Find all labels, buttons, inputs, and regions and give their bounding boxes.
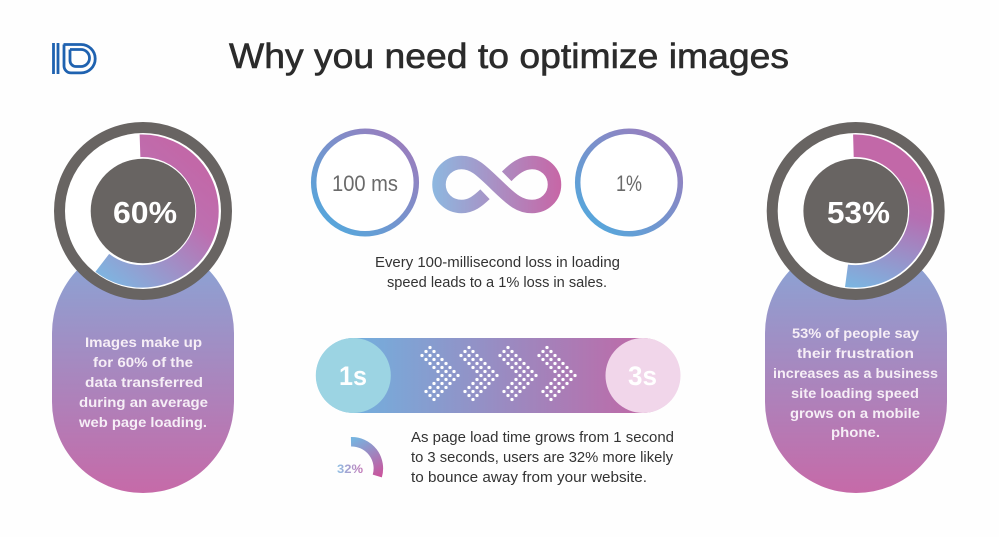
chart: 32% arc: 32% [337, 462, 363, 476]
chart: 32% arc [337, 442, 378, 476]
donut: 53% [772, 128, 939, 294]
arrows: dotted chevrons [422, 348, 575, 404]
text: left pill: during an average [79, 394, 208, 410]
circle: 100 ms [314, 131, 416, 234]
donut: 60% [60, 128, 226, 294]
text: left pill: data transferred [85, 374, 203, 390]
text: left pill: web page loading. [78, 414, 207, 430]
text: left pill [78, 334, 208, 430]
pill: left [52, 242, 234, 493]
text: sales loss: speed leads to a 1% loss in sales. [387, 275, 607, 291]
progress bar: 1s to 3s [316, 338, 680, 413]
text: right pill: site loading speed [791, 385, 919, 401]
icon: infinity [439, 162, 554, 206]
text: right pill: 53% of people say [792, 325, 919, 341]
text: sales loss: Every 100-millisecond loss in loading [375, 255, 620, 271]
donut: 53%: 53% [827, 195, 890, 230]
circle: 100 ms: 100 ms [332, 171, 398, 196]
text: right pill: increases as a business [773, 365, 938, 381]
badge: 1s: 1s [339, 361, 367, 391]
text: right pill: phone. [831, 424, 880, 440]
panel: 60% statistic [52, 128, 234, 493]
text: bounce rate: to bounce away from your website. [411, 470, 647, 486]
text: right pill: their frustration [797, 345, 914, 361]
badge: 3s: 3s [628, 361, 657, 391]
badge: 1s [316, 338, 391, 413]
circle: 1% [578, 131, 680, 234]
circle: 1%: 1% [616, 171, 642, 196]
text: bounce rate: As page load time grows from 1 second [411, 430, 674, 446]
logo [54, 43, 95, 74]
text: bounce rate: to 3 seconds, users are 32% more likely [411, 450, 674, 466]
text: bounce rate [411, 430, 674, 486]
text: right pill: grows on a mobile [790, 405, 920, 421]
text: left pill: for 60% of the [93, 354, 193, 370]
donut: 60%: 60% [113, 195, 177, 230]
text: right pill [773, 325, 938, 440]
title: Why you need to optimize images [229, 37, 789, 76]
pill: right [765, 242, 947, 493]
panel: 53% statistic [765, 128, 947, 493]
text: left pill: Images make up [85, 334, 202, 350]
text: sales loss [375, 255, 620, 291]
badge: 3s [606, 338, 680, 413]
